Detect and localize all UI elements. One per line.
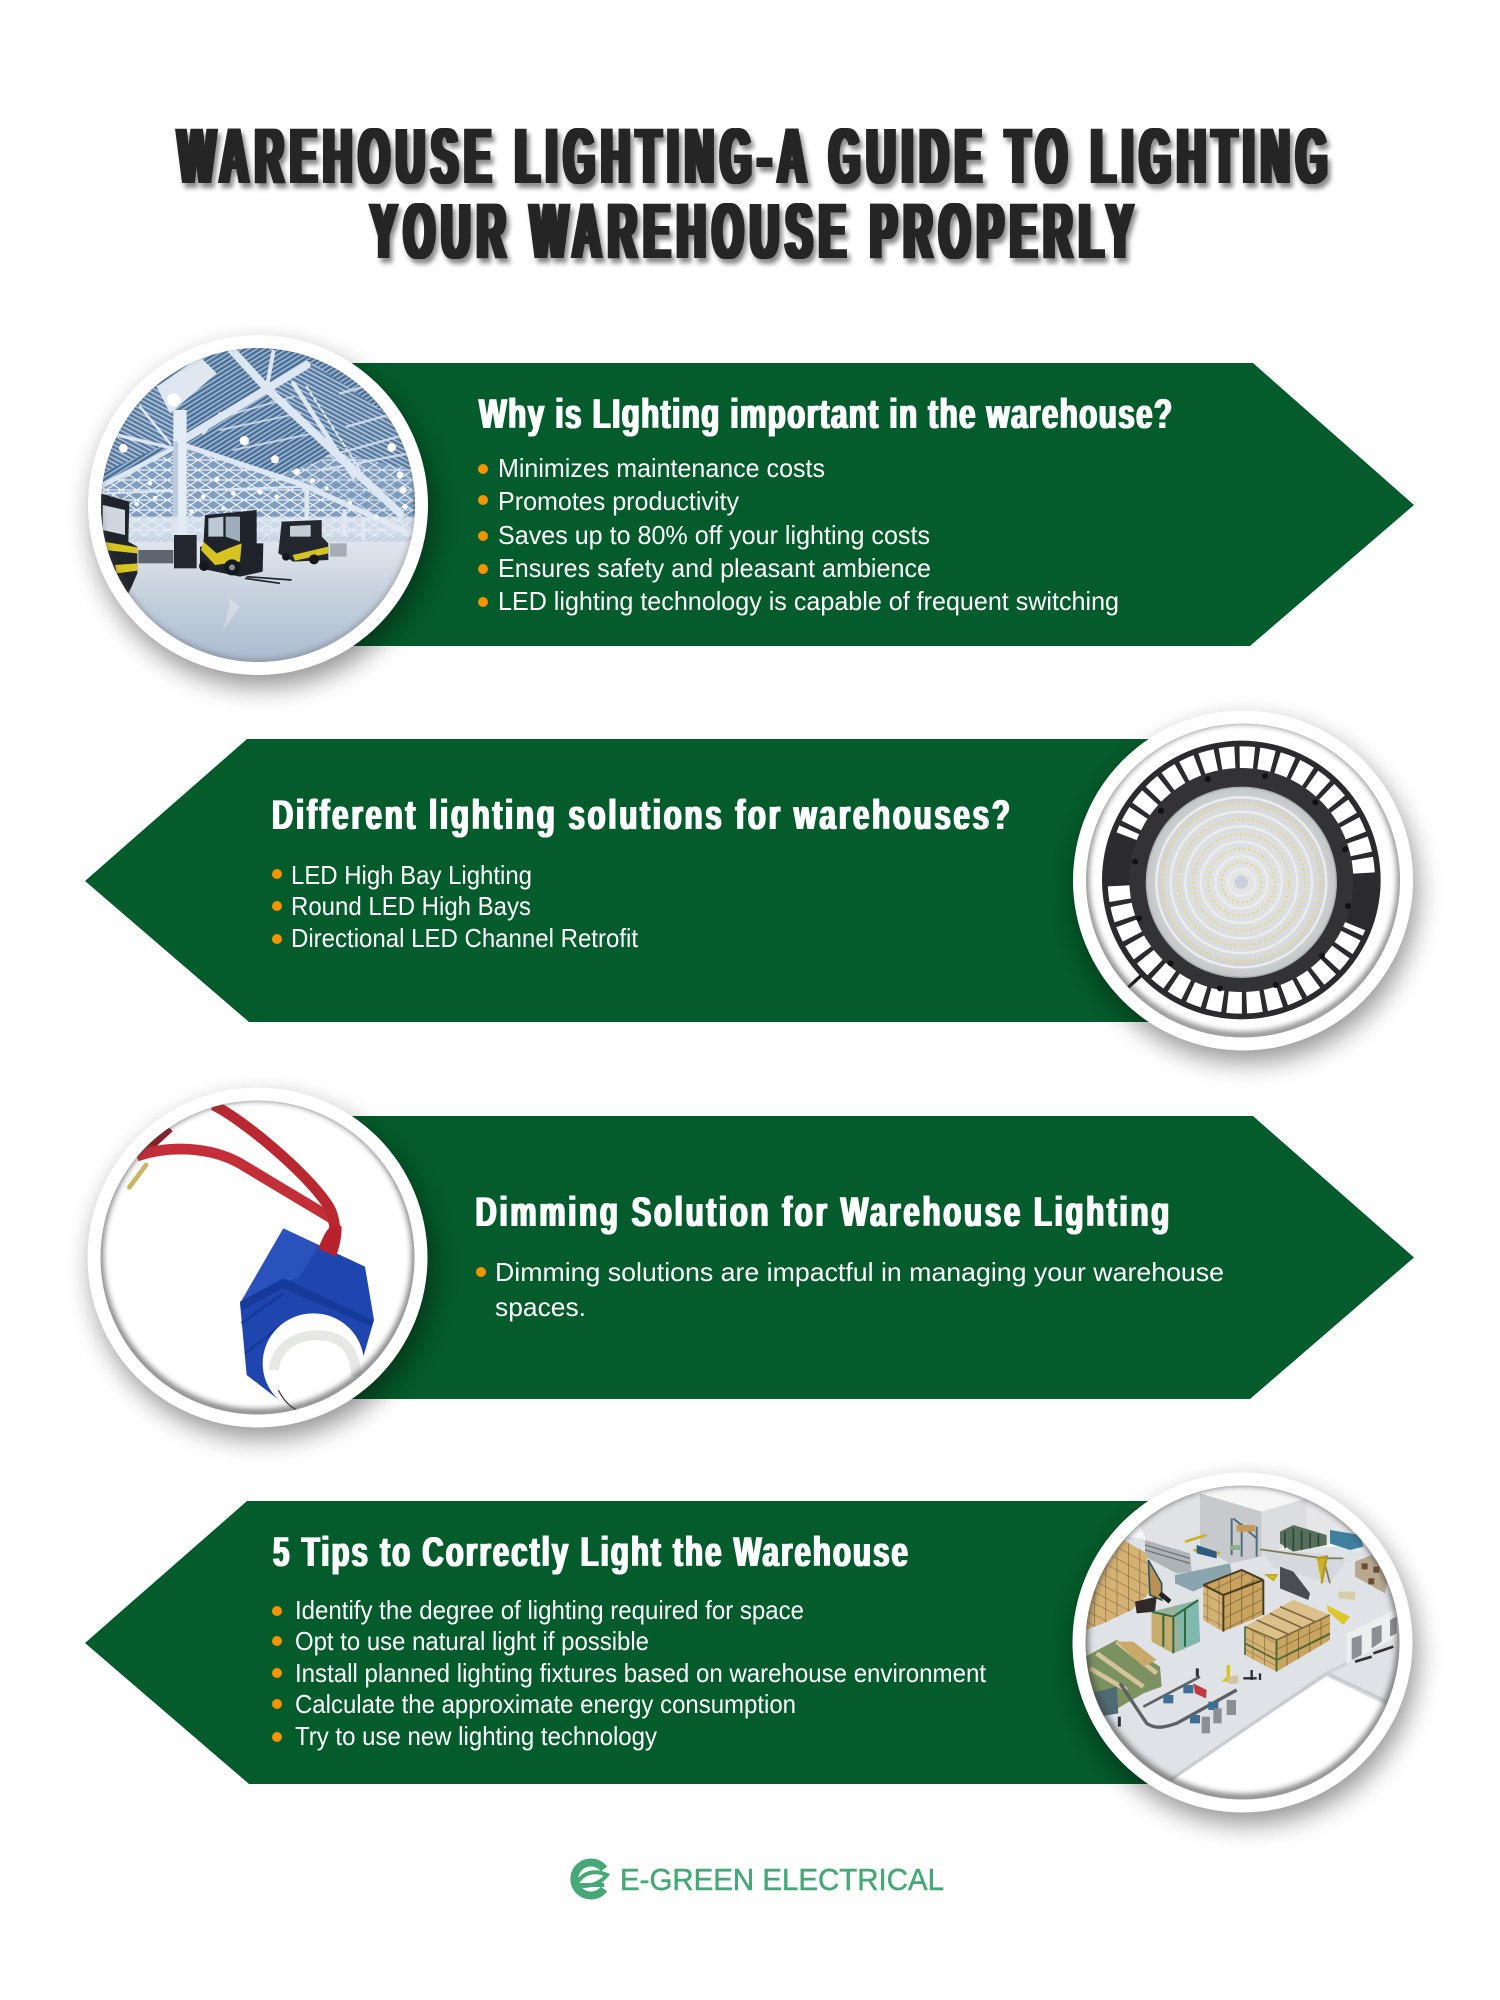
- photo circle: round LED high bay: [1073, 710, 1417, 1062]
- arrow banner 2: [85, 739, 1243, 1022]
- arrow banner 1: [258, 363, 1414, 646]
- list 3: [476, 1257, 1224, 1322]
- list 3: spaces.: [495, 1292, 586, 1322]
- list 2: Directional LED Channel Retrofit: [291, 923, 639, 953]
- arrow banner 3: [258, 1116, 1414, 1399]
- list 4: Opt to use natural light if possible: [295, 1626, 649, 1656]
- title: [178, 112, 1327, 276]
- back zone: [1280, 1525, 1327, 1552]
- list 1: Promotes productivity: [498, 486, 739, 516]
- panel: dimming solution: [88, 1088, 1414, 1439]
- arrow banner 4: [85, 1501, 1243, 1784]
- list 1: Minimizes maintenance costs: [498, 453, 825, 483]
- list 3: Dimming solutions are impactful in managing your warehouse: [495, 1257, 1224, 1287]
- list 4: Calculate the approximate energy consumption: [295, 1689, 796, 1719]
- large tan rack: [1245, 1600, 1330, 1672]
- list 4: [272, 1595, 987, 1751]
- docks: [1347, 1608, 1400, 1663]
- green rack: [1152, 1600, 1200, 1653]
- list 1: LED lighting technology is capable of frequent switching: [498, 586, 1119, 616]
- shelving: [1145, 1540, 1192, 1573]
- heading 4: 5 Tips to Correctly Light the Warehouse: [273, 1528, 908, 1575]
- panel: lighting solutions: [85, 710, 1417, 1062]
- list 4: Install planned lighting fixtures based on warehouse environment: [295, 1658, 987, 1688]
- photo circle: blue dimmer switch: [88, 1088, 432, 1439]
- heading 2: Different lighting solutions for warehouses?: [272, 791, 1010, 838]
- title: WAREHOUSE LIGHTING-A GUIDE TO LIGHTING: [178, 112, 1327, 201]
- panel: tips: [85, 1472, 1420, 1833]
- list 1: Saves up to 80% off your lighting costs: [498, 520, 930, 550]
- list 1: Ensures safety and pleasant ambience: [498, 553, 931, 583]
- logo: E-Green Electrical: [574, 1862, 944, 1897]
- tan stacks at left: [1085, 1540, 1149, 1630]
- middle rack: [1203, 1570, 1263, 1632]
- list 2: Round LED High Bays: [291, 891, 531, 921]
- forklifts: [100, 493, 137, 593]
- panel: why lighting is important: [88, 335, 1414, 687]
- list 2: LED High Bay Lighting: [291, 860, 532, 890]
- heading 3: Dimming Solution for Warehouse Lighting: [476, 1188, 1169, 1235]
- list 4: Identify the degree of lighting required for space: [295, 1595, 804, 1625]
- white cut out: [1170, 1676, 1386, 1800]
- photo circle: warehouse with forklifts: [88, 335, 432, 687]
- bottom-left conveyors: [1085, 1640, 1162, 1717]
- list 2: [272, 860, 639, 953]
- wordmark: E-GREEN ELECTRICAL: [620, 1862, 944, 1897]
- heading 1: Why is LIghting important in the warehouse?: [479, 390, 1172, 437]
- photo circle: warehouse floor plan: [1072, 1472, 1420, 1833]
- list 1: [478, 453, 1119, 616]
- icon: e leaf: [574, 1863, 607, 1896]
- title: YOUR WAREHOUSE PROPERLY: [370, 187, 1133, 276]
- list 4: Try to use new lighting technology: [295, 1721, 657, 1751]
